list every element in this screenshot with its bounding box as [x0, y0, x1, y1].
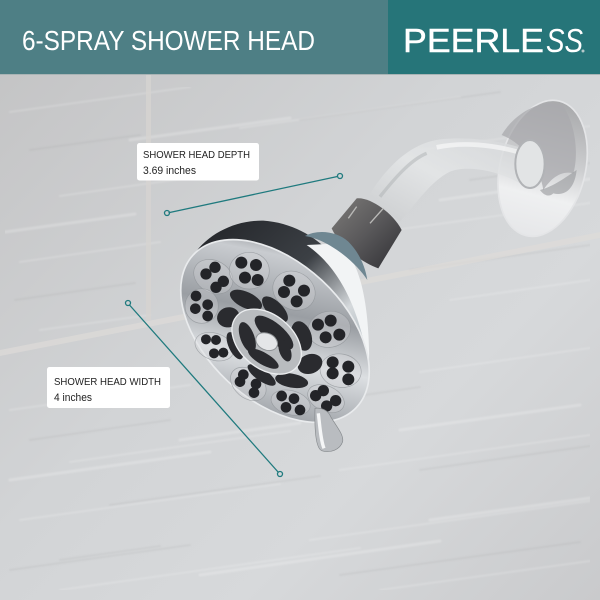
back of head	[307, 243, 369, 373]
wall flange	[484, 91, 600, 246]
head face	[146, 204, 404, 458]
flange reflection	[540, 170, 577, 196]
shower arm and wall flange	[332, 91, 600, 268]
center spray ring	[219, 296, 314, 387]
dimension line: depth	[164, 174, 342, 216]
flange shadow shape	[502, 103, 576, 190]
dimension line: width	[126, 300, 282, 476]
shower head	[146, 204, 404, 458]
arm tube	[368, 138, 523, 222]
callout: shower head width: 4 inches	[54, 392, 92, 404]
raised petals behind clusters	[185, 252, 364, 419]
petal spray zones	[215, 285, 325, 390]
title: 6-SPRAY SHOWER HEAD	[22, 25, 315, 56]
head outer shell	[183, 221, 369, 390]
callout: shower head depth	[137, 143, 259, 180]
arm collar	[515, 140, 545, 188]
callout: shower head width	[47, 367, 170, 408]
callout: shower head width: SHOWER HEAD WIDTH	[54, 376, 161, 388]
callout: shower head depth: 3.69 inches	[143, 165, 196, 177]
spray selector lever	[315, 408, 343, 452]
outer spray clusters	[190, 257, 354, 415]
logo: Peerless: PEERLE	[403, 22, 544, 59]
header band	[0, 0, 600, 75]
neck band	[305, 232, 367, 280]
callout: shower head depth: SHOWER HEAD DEPTH	[143, 149, 250, 161]
ball connector	[332, 198, 402, 268]
logo: Peerless: SS	[546, 22, 583, 59]
